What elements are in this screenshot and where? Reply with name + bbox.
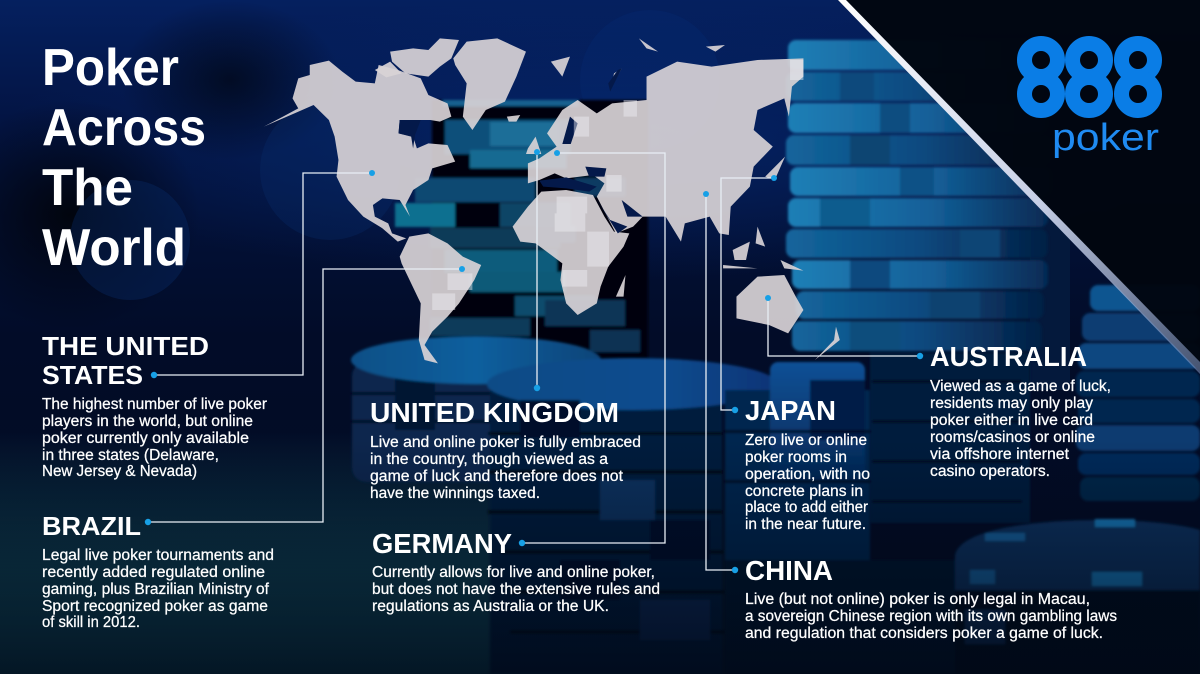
right rear stack bbox=[1030, 100, 1070, 390]
text block: in the country, though viewed as a bbox=[370, 451, 608, 468]
logo: 888 poker bbox=[1024, 44, 1159, 159]
text block: have the winnings taxed. bbox=[370, 485, 540, 502]
text block: recently added regulated online bbox=[42, 564, 265, 581]
text block: Viewed as a game of luck, bbox=[930, 378, 1111, 395]
Eurasia bbox=[528, 58, 803, 242]
text block bbox=[370, 434, 641, 502]
central dark stack bbox=[395, 100, 648, 362]
text block: poker currently only available bbox=[42, 430, 249, 447]
text block: casino operators. bbox=[930, 463, 1050, 480]
heading: BRAZIL bbox=[42, 511, 141, 541]
text block: residents may only play bbox=[930, 395, 1093, 412]
text block: operation, with no bbox=[745, 466, 870, 483]
text block: poker either in live card bbox=[930, 412, 1093, 429]
text block: Live (but not online) poker is only legal in Macau, bbox=[745, 591, 1090, 608]
islands bbox=[507, 38, 840, 360]
world map bbox=[264, 38, 840, 363]
text block: place to add either bbox=[745, 499, 868, 516]
text block: players in the world, but online bbox=[42, 413, 253, 430]
text block bbox=[930, 378, 1111, 480]
heading: GERMANY bbox=[372, 528, 512, 559]
South America bbox=[400, 233, 481, 363]
title: The bbox=[42, 159, 133, 217]
logo: 888 poker: poker bbox=[1052, 117, 1159, 159]
connector lines bbox=[148, 152, 920, 570]
light chip reflections bbox=[432, 60, 803, 310]
text block: regulations as Australia or the UK. bbox=[372, 598, 609, 615]
panel: germany bbox=[372, 528, 660, 615]
text block bbox=[745, 432, 870, 533]
Africa bbox=[513, 190, 629, 315]
right side stack bbox=[1076, 285, 1200, 501]
dark corner triangle bbox=[838, 0, 1200, 372]
text block: Legal live poker tournaments and bbox=[42, 547, 274, 564]
text block: but does not have the extensive rules and bbox=[372, 581, 660, 598]
heading: UNITED KINGDOM bbox=[370, 397, 619, 428]
text block: gaming, plus Brazilian Ministry of bbox=[42, 581, 270, 598]
Australia bbox=[736, 275, 803, 333]
text block bbox=[42, 396, 267, 480]
North America bbox=[264, 61, 455, 242]
text block: and regulation that considers poker a game of luck. bbox=[745, 625, 1103, 642]
text block: concrete plans in bbox=[745, 483, 863, 500]
title: World bbox=[42, 219, 186, 277]
text block: The highest number of live poker bbox=[42, 396, 267, 413]
panel: united kingdom bbox=[370, 397, 641, 502]
text block: New Jersey & Nevada) bbox=[42, 463, 197, 480]
heading bbox=[42, 331, 209, 390]
text block: rooms/casinos or online bbox=[930, 429, 1095, 446]
heading: STATES bbox=[42, 360, 143, 390]
map location dots bbox=[145, 149, 923, 573]
text block: of skill in 2012. bbox=[42, 614, 140, 631]
text block: via offshore internet bbox=[930, 446, 1070, 463]
text block: Live and online poker is fully embraced bbox=[370, 434, 641, 451]
title bbox=[42, 39, 206, 277]
inland seas bbox=[399, 68, 643, 233]
text block: in three states (Delaware, bbox=[42, 447, 219, 464]
Arctic islands bbox=[375, 38, 459, 77]
text block: game of luck and therefore does not bbox=[370, 468, 624, 485]
panel: brazil bbox=[42, 511, 274, 631]
title: Poker bbox=[42, 39, 179, 97]
panel: australia bbox=[930, 341, 1111, 480]
panel: japan bbox=[745, 395, 870, 533]
text block: Zero live or online bbox=[745, 432, 867, 449]
heading: THE UNITED bbox=[42, 331, 209, 361]
diagonal line bbox=[838, 0, 1200, 374]
right tall stack bbox=[786, 40, 1052, 523]
panel: the united states bbox=[42, 331, 267, 480]
text block bbox=[42, 547, 274, 631]
text block bbox=[745, 591, 1117, 642]
panel: china bbox=[745, 555, 1117, 642]
text block bbox=[372, 564, 660, 615]
text block: Currently allows for live and online poker, bbox=[372, 564, 655, 581]
heading: JAPAN bbox=[745, 395, 836, 426]
text block: Sport recognized poker as game bbox=[42, 598, 268, 615]
text block: in the near future. bbox=[745, 516, 866, 533]
text block: poker rooms in bbox=[745, 449, 847, 466]
Greenland bbox=[453, 38, 526, 130]
foreground stacks bbox=[351, 336, 1200, 674]
title: Across bbox=[42, 99, 206, 157]
text block: a sovereign Chinese region with its own gambling laws bbox=[745, 608, 1117, 625]
heading: CHINA bbox=[745, 555, 833, 586]
heading: AUSTRALIA bbox=[930, 341, 1087, 372]
